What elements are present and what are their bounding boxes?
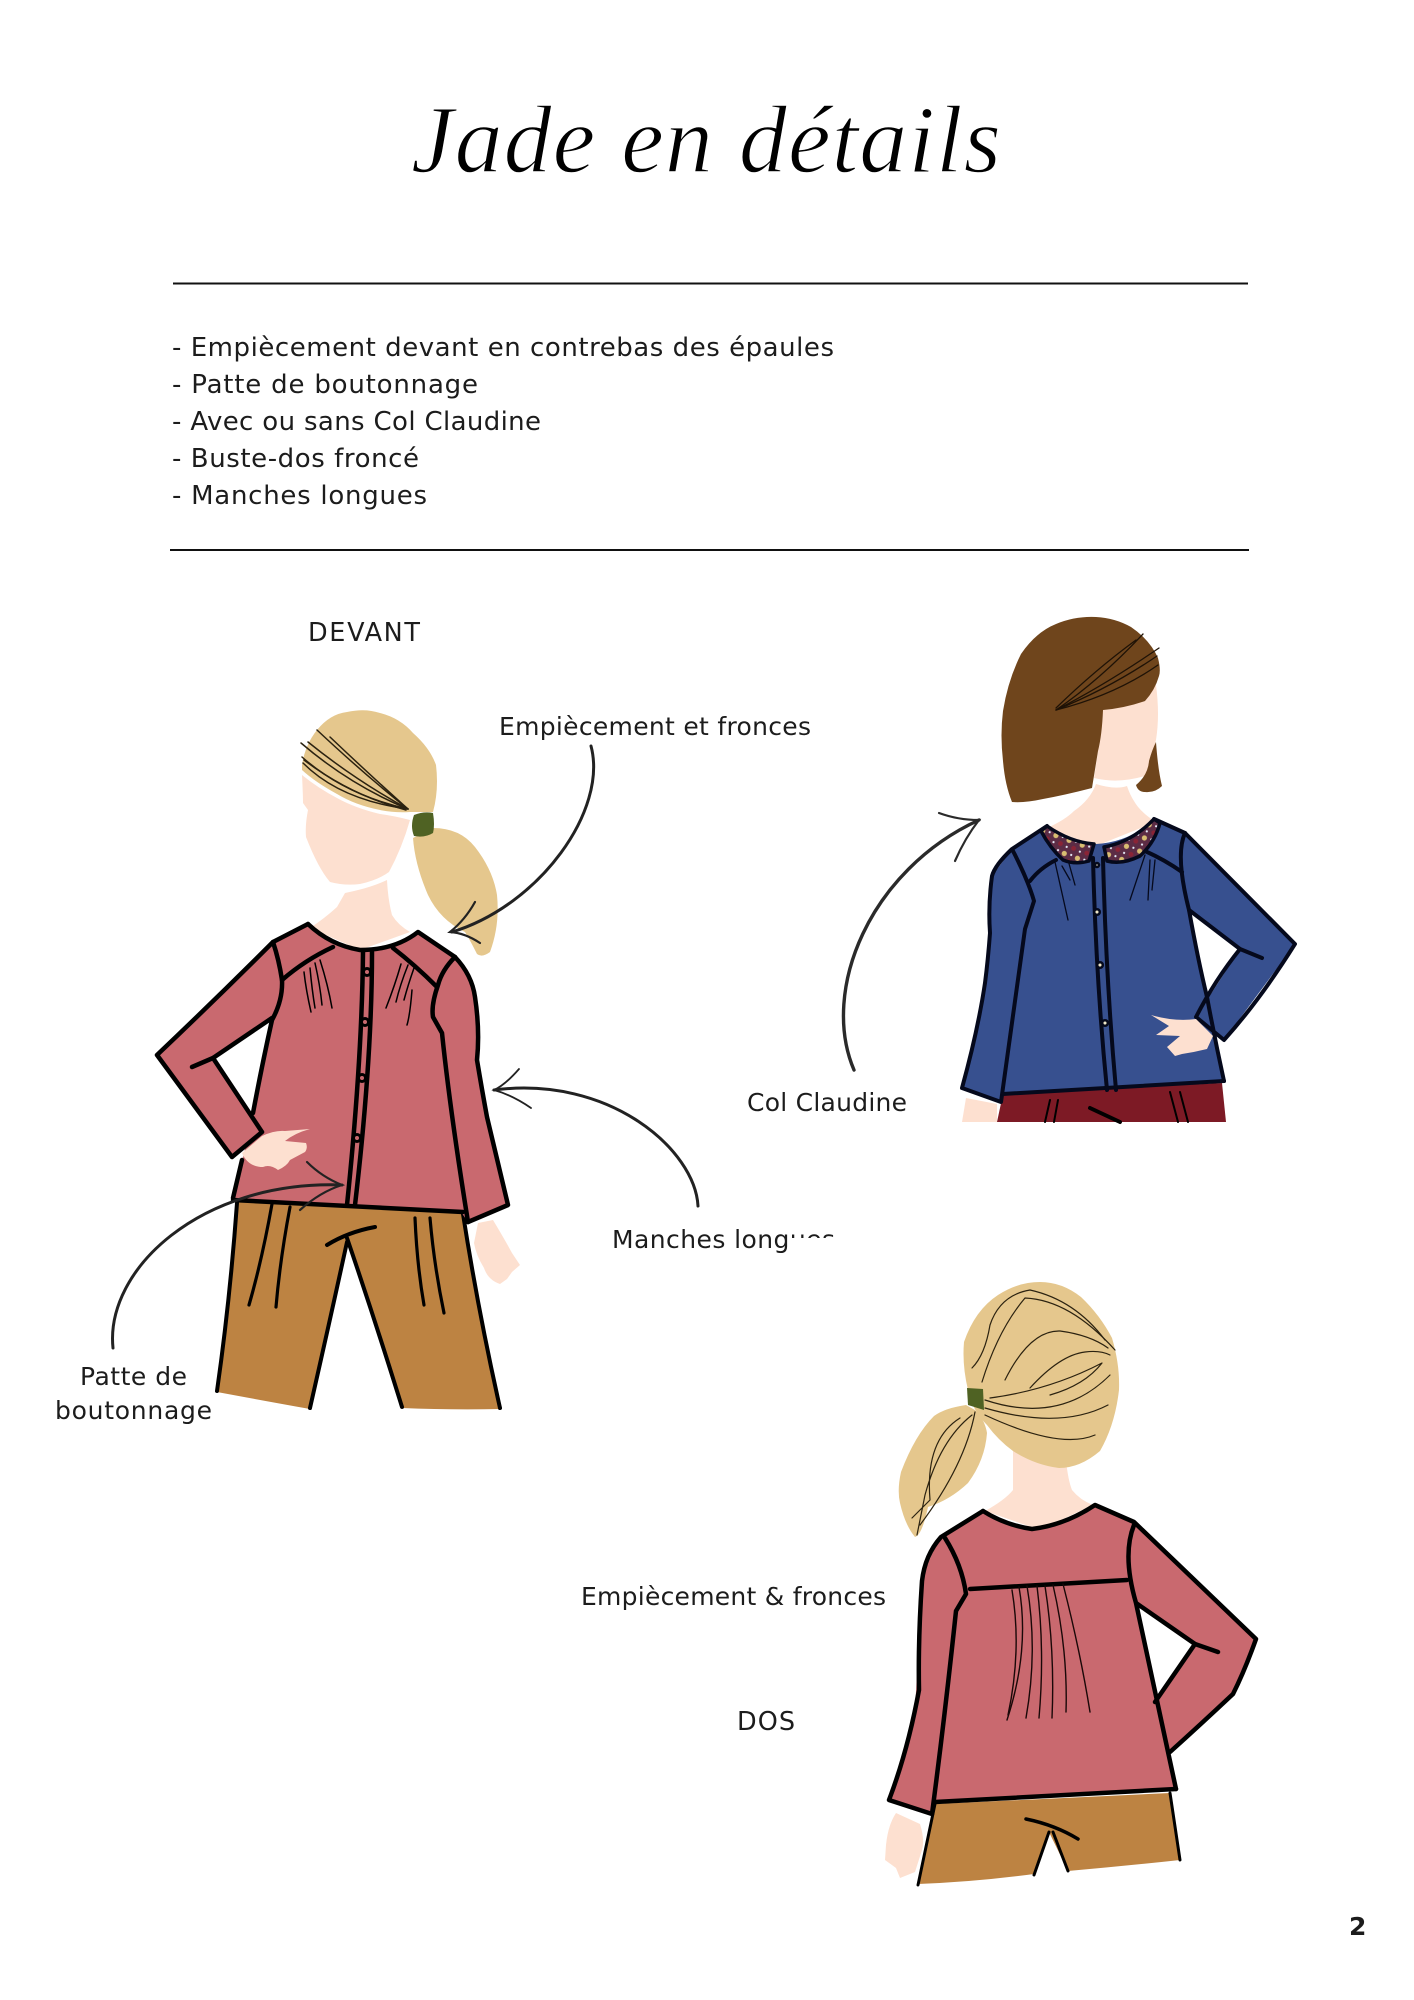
hair strands xyxy=(912,1290,1115,1535)
figure: devant xyxy=(157,710,520,1409)
blue blouse xyxy=(962,819,1295,1102)
pants xyxy=(918,1793,1180,1885)
blouse xyxy=(157,924,508,1222)
hair band xyxy=(412,812,434,837)
skin: neck and hands xyxy=(310,880,520,1284)
back hand xyxy=(885,1813,923,1878)
face xyxy=(302,775,410,885)
page number: 2 xyxy=(1349,1912,1366,1941)
arrow: patte de boutonnage xyxy=(113,1162,342,1348)
title: Jade en détails xyxy=(411,86,1001,193)
pants xyxy=(217,1202,501,1409)
feature list xyxy=(172,333,834,511)
hand over blouse xyxy=(242,1129,310,1170)
hair xyxy=(899,1282,1119,1537)
label: col claudine: Col Claudine xyxy=(747,1088,907,1117)
figure: dos xyxy=(885,1282,1256,1885)
buttons xyxy=(1094,863,1108,1026)
figure: col claudine xyxy=(962,617,1295,1122)
brown hair xyxy=(1002,617,1162,802)
burgundy pants xyxy=(997,1083,1226,1122)
feature list: - Empiècement devant en contrebas des épaules xyxy=(172,333,834,363)
label: patte de boutonnage: Patte de xyxy=(80,1362,187,1391)
arrow: col claudine xyxy=(843,813,979,1070)
pink blouse back xyxy=(889,1505,1256,1814)
divider top xyxy=(173,282,1248,284)
feature list: - Avec ou sans Col Claudine xyxy=(172,407,541,437)
label: patte de boutonnage: boutonnage xyxy=(55,1396,212,1425)
skin: face and neck xyxy=(962,685,1158,1122)
divider bottom xyxy=(170,549,1249,551)
hair strands xyxy=(1056,634,1159,710)
label: devant: DEVANT xyxy=(308,618,420,648)
label: empiecement et fronces dos: Empiècement & fronces xyxy=(581,1582,886,1611)
arrow: empiecement xyxy=(450,746,594,943)
feature list: - Patte de boutonnage xyxy=(172,370,478,400)
arrow: manches longues xyxy=(494,1069,698,1206)
buttons xyxy=(354,968,370,1142)
hand on hip xyxy=(1151,1015,1213,1056)
label: dos: DOS xyxy=(737,1707,795,1737)
label: empiecement et fronces: Empiècement et fronces xyxy=(499,712,811,741)
neck xyxy=(985,1450,1093,1530)
label: manches longues (partly masked): Manches longues xyxy=(612,1225,835,1254)
hair strands xyxy=(301,730,408,810)
hair band xyxy=(967,1388,984,1410)
back gathers xyxy=(1007,1584,1090,1720)
peter pan collar xyxy=(1041,819,1160,863)
hair and ponytail xyxy=(302,710,498,956)
feature list: - Manches longues xyxy=(172,481,427,511)
feature list: - Buste-dos froncé xyxy=(172,444,419,474)
label: patte de boutonnage xyxy=(55,1362,212,1425)
